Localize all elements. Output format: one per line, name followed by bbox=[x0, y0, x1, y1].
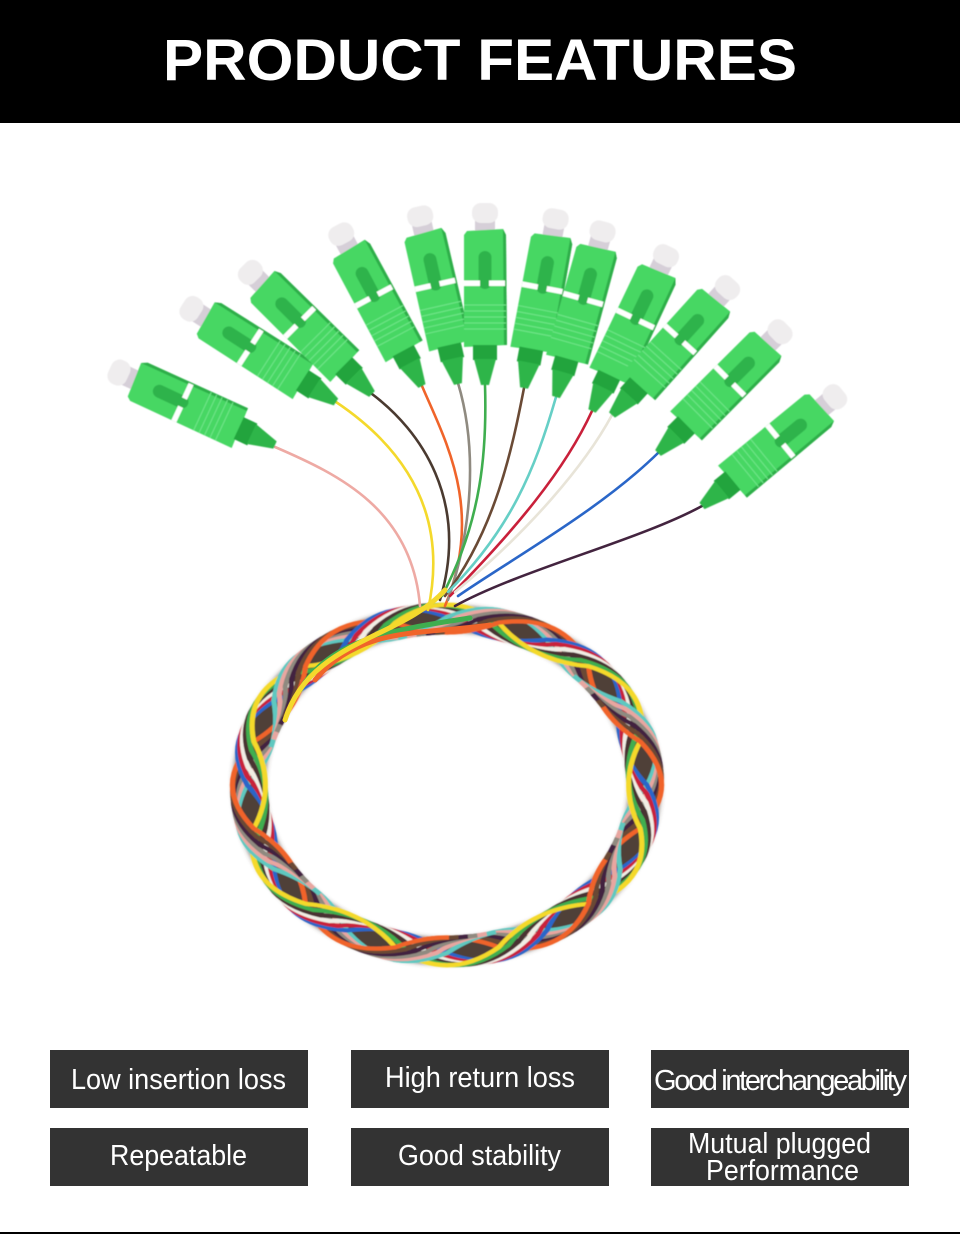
connector 7 bbox=[503, 205, 579, 392]
connector 2 bbox=[172, 285, 348, 420]
connector 8 bbox=[536, 216, 626, 403]
feature: good stability: Good stability bbox=[398, 1140, 561, 1172]
feature: low insertion loss: Low insertion loss bbox=[71, 1064, 286, 1096]
feature: low insertion loss bbox=[50, 1050, 308, 1108]
title banner bbox=[0, 0, 960, 123]
feature: mutual plugged performance: Performance bbox=[706, 1155, 859, 1187]
feature: high return loss: High return loss bbox=[385, 1062, 575, 1094]
connector 1 bbox=[101, 348, 284, 464]
connector 6 bbox=[464, 203, 507, 385]
connector 5 bbox=[398, 202, 479, 389]
SC/APC connectors bbox=[101, 202, 857, 523]
feature: mutual plugged performance bbox=[651, 1128, 909, 1187]
connector 12 bbox=[689, 374, 857, 523]
feature: repeatable bbox=[50, 1128, 308, 1186]
feature: mutual plugged performance: Mutual plugged bbox=[688, 1128, 871, 1160]
connector 10 bbox=[596, 266, 751, 430]
feature: repeatable: Repeatable bbox=[110, 1140, 247, 1172]
connector 9 bbox=[573, 238, 690, 420]
loose fibers bbox=[275, 383, 702, 610]
feature: high return loss bbox=[351, 1050, 609, 1108]
connector 4 bbox=[318, 215, 441, 396]
title: PRODUCT FEATURES bbox=[163, 28, 797, 93]
bottom rule bbox=[0, 1232, 960, 1234]
connector 3 bbox=[228, 250, 388, 409]
coiled multicolour fiber ring bbox=[151, 536, 743, 1034]
feature: good interchangeability bbox=[651, 1050, 909, 1108]
connector 11 bbox=[643, 310, 803, 469]
feature: good interchangeability: Good interchangeability bbox=[654, 1065, 908, 1097]
fiber bundle crossing at top of ring bbox=[285, 590, 490, 720]
feature: good stability bbox=[351, 1128, 609, 1186]
